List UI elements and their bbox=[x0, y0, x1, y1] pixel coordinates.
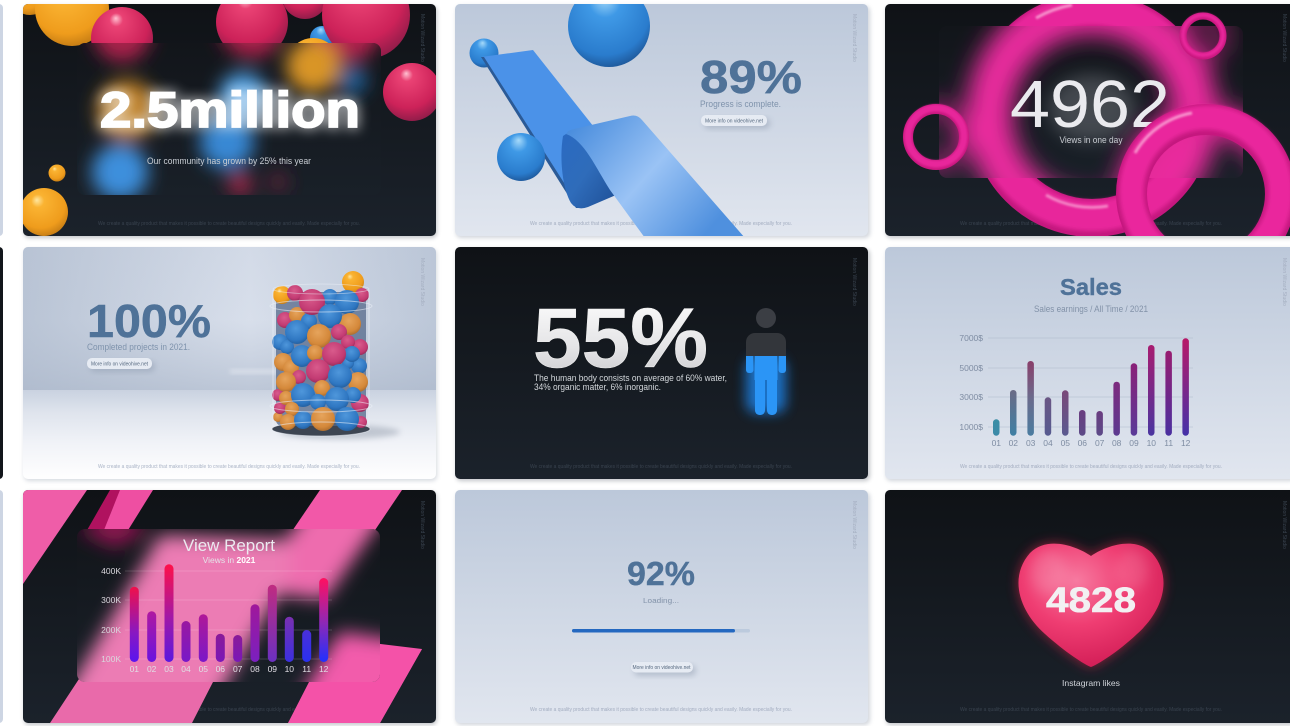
vertical credit: Motion Wizard Studio bbox=[1281, 258, 1287, 306]
footer text: We create a quality product that makes it possible to create beautiful designs quickly and easily. Made especially for you. bbox=[98, 221, 360, 227]
bar chart: views: 12 bbox=[319, 664, 329, 674]
big sphere bbox=[568, 0, 650, 67]
figure: 4828 bbox=[1046, 581, 1136, 620]
ribbon: lower sheet bbox=[481, 50, 592, 208]
footer text: We create a quality product that makes it possible to create beautiful designs quickly and easily. Made especially for you. bbox=[960, 221, 1222, 227]
bar chart: sales: 09 bbox=[1129, 438, 1139, 448]
bar chart: sales: 04 bbox=[1043, 438, 1053, 448]
vertical credit: Motion Wizard Studio bbox=[419, 501, 425, 549]
ribbon: upper stripe bbox=[252, 490, 402, 597]
ribbon: lower stripe bbox=[50, 548, 290, 723]
figure: 100% bbox=[87, 295, 211, 347]
bar chart: views: 09 bbox=[268, 664, 277, 674]
small sphere bbox=[470, 38, 498, 68]
bar chart: views: 04 bbox=[181, 664, 191, 674]
figure: 4962 bbox=[1010, 67, 1170, 142]
vertical credit: Motion Wizard Studio bbox=[419, 258, 425, 306]
panel: 92% loading bbox=[455, 490, 870, 725]
icon: person with water level bbox=[746, 308, 786, 415]
ribbon: curl bbox=[561, 130, 616, 208]
bar chart: sales: 11 bbox=[1164, 438, 1173, 448]
bar chart: sales: 05 bbox=[1061, 438, 1070, 448]
footer text: We create a quality product that makes it possible to create beautiful designs quickly and easily. Made especially for you. bbox=[98, 464, 360, 470]
bar chart: sales: 02 bbox=[1009, 438, 1018, 448]
button: More info on videohive.net bbox=[91, 361, 149, 367]
big ring bbox=[989, 5, 1195, 218]
frosted glass card bbox=[60, 490, 430, 726]
bar chart: views: 07 bbox=[233, 664, 243, 674]
footer text: We create a quality product that makes it possible to create beautiful designs quickly and easily. Made especially for you. bbox=[960, 707, 1222, 713]
vertical credit: Motion Wizard Studio bbox=[851, 501, 857, 549]
bar chart: views: 03 bbox=[164, 664, 174, 674]
panel: 55% human body bbox=[455, 247, 870, 481]
footer text: We create a quality product that makes it possible to create beautiful designs quickly and easily. Made especially for you. bbox=[960, 464, 1222, 470]
button: More info on videohive.net bbox=[632, 665, 691, 671]
button bbox=[701, 115, 770, 129]
progress bar bbox=[572, 629, 750, 632]
jar of spheres bbox=[270, 271, 400, 439]
figure: 92% bbox=[627, 555, 695, 592]
bar chart: views: 08 bbox=[250, 664, 260, 674]
ribbon: lower right outside glass bbox=[288, 649, 422, 723]
small ring left bbox=[908, 108, 964, 165]
medium sphere bbox=[497, 133, 545, 181]
footer text: We create a quality product that makes it possible to create beautiful designs quickly and easily. Made especially for you. bbox=[530, 221, 792, 227]
panel: instagram likes bbox=[885, 490, 1290, 725]
bar chart: views bbox=[101, 564, 332, 674]
subtitle: Our community has grown by 25% this year bbox=[147, 156, 311, 167]
button bbox=[87, 358, 155, 372]
caption: Progress is complete. bbox=[700, 99, 781, 110]
sharp spheres bbox=[10, 0, 441, 236]
panel: 4962 views bbox=[884, 4, 1290, 240]
icon: heart bbox=[1018, 544, 1164, 667]
vertical credit: Motion Wizard Studio bbox=[1281, 501, 1287, 549]
frosted glass card bbox=[78, 43, 381, 195]
bar chart: sales: 1000$ bbox=[959, 422, 983, 432]
title: Sales bbox=[1060, 274, 1122, 300]
bar chart: sales: 10 bbox=[1147, 438, 1156, 448]
bar chart: views: 06 bbox=[216, 664, 225, 674]
bar chart: sales: 03 bbox=[1026, 438, 1036, 448]
caption: Completed projects in 2021. bbox=[87, 342, 190, 353]
figure: 55% bbox=[533, 291, 708, 385]
foreground ring bbox=[1132, 113, 1280, 268]
footer text: We create a quality product that makes it possible to create beautiful designs quickly and easily. Made especially for you. bbox=[530, 707, 792, 713]
headline glow: 2.5million bbox=[100, 82, 360, 138]
vertical credit: Motion Wizard Studio bbox=[851, 14, 857, 62]
headline: 2.5million bbox=[100, 82, 360, 138]
subtitle: Views in 2021 bbox=[203, 555, 256, 565]
caption: Views in one day bbox=[1060, 135, 1123, 146]
bar chart: sales bbox=[959, 333, 1193, 448]
bar chart: views: 100K bbox=[101, 654, 121, 664]
description: 34% organic matter, 6% inorganic. bbox=[534, 382, 661, 393]
frosted glass card bbox=[939, 26, 1243, 178]
panel: 100% completed projects bbox=[23, 247, 437, 481]
panel: view report bbox=[23, 490, 437, 726]
bar chart: views: 05 bbox=[199, 664, 208, 674]
figure: 89% bbox=[700, 51, 802, 103]
bar chart: sales: 07 bbox=[1095, 438, 1105, 448]
bar chart: sales: 06 bbox=[1078, 438, 1087, 448]
ribbon: top left bbox=[23, 490, 153, 584]
vertical credit: Motion Wizard Studio bbox=[419, 14, 425, 62]
bar chart: sales: 7000$ bbox=[959, 333, 983, 343]
ribbon: upper sheet bbox=[566, 116, 745, 238]
bar chart: sales: 08 bbox=[1112, 438, 1122, 448]
vertical credit: Motion Wizard Studio bbox=[851, 258, 857, 306]
bar chart: sales: 12 bbox=[1181, 438, 1191, 448]
caption: Instagram likes bbox=[1062, 678, 1120, 688]
footer text: We create a quality product that makes it possible to create beautiful designs quickly and easily. Made especially for you. bbox=[98, 707, 360, 713]
bar chart: sales: 5000$ bbox=[959, 363, 983, 373]
bar chart: views: 10 bbox=[285, 664, 294, 674]
bar chart: views: 300K bbox=[101, 595, 121, 605]
panel: sales chart bbox=[885, 247, 1290, 481]
description bbox=[534, 373, 727, 393]
button bbox=[631, 662, 696, 676]
footer text: We create a quality product that makes it possible to create beautiful designs quickly and easily. Made especially for you. bbox=[530, 464, 792, 470]
bar chart: sales: 3000$ bbox=[959, 392, 983, 402]
small ring top right bbox=[1183, 15, 1223, 56]
panel: left edge slivers bbox=[0, 4, 3, 723]
bar chart: views: 02 bbox=[147, 664, 157, 674]
bar chart: sales: 01 bbox=[992, 438, 1001, 448]
panel: 89% progress bbox=[455, 0, 870, 238]
description: The human body consists on average of 60% water, bbox=[534, 373, 727, 384]
bar chart: views: 400K bbox=[101, 566, 121, 576]
caption: Loading... bbox=[643, 596, 679, 605]
vertical credit: Motion Wizard Studio bbox=[1281, 14, 1287, 62]
button: More info on videohive.net bbox=[705, 118, 764, 124]
subtitle: Sales earnings / All Time / 2021 bbox=[1034, 304, 1148, 315]
bar chart: views: 01 bbox=[130, 664, 139, 674]
bar chart: views: 200K bbox=[101, 625, 121, 635]
bar chart: views: 11 bbox=[302, 664, 311, 674]
ribbon: lower right bbox=[288, 640, 422, 723]
title: View Report bbox=[183, 536, 275, 555]
panel: 2.5 million community bbox=[10, 0, 441, 238]
